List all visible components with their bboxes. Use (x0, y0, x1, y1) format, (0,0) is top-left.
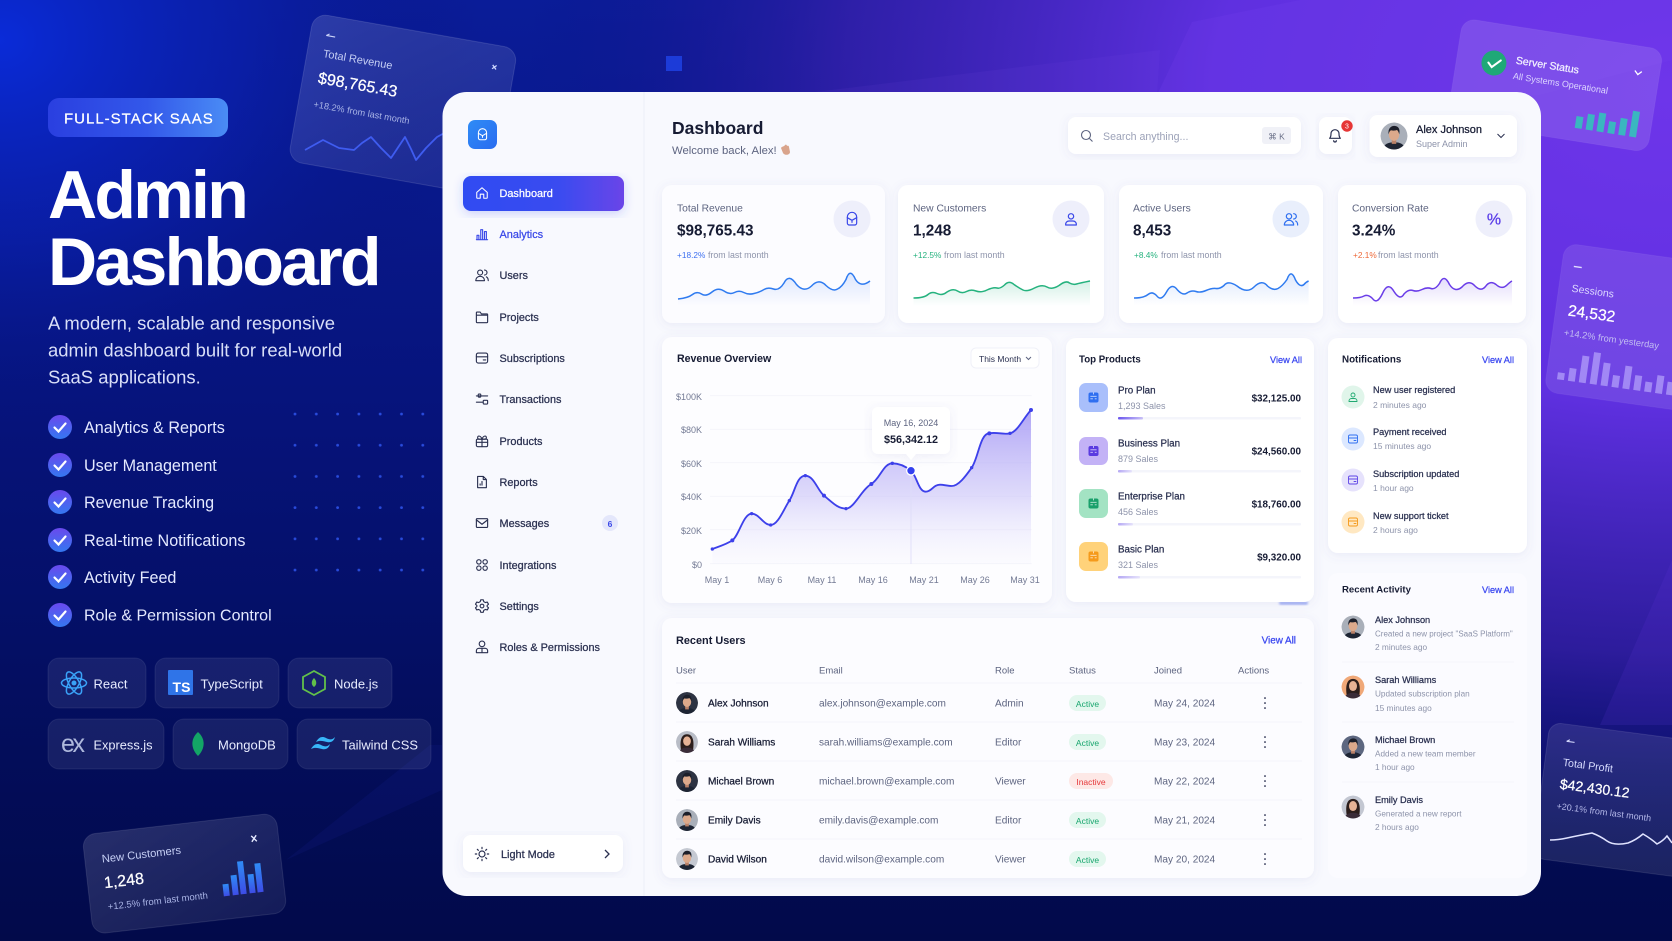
panel: Recent Activity: Recent Activity (1342, 584, 1412, 595)
nav: Settings: Settings (500, 601, 539, 613)
product: Business Plan: Business Plan (1118, 438, 1180, 449)
chip: TypeScript: TypeScript (200, 676, 263, 691)
panel: Notifications: Notifications (1342, 354, 1402, 365)
notification: New user registered (1342, 385, 1455, 410)
stat card: Conversion Rate: 3.24% (1352, 222, 1396, 239)
y axis labels: $40K (681, 492, 702, 502)
notification: New user registered: 2 minutes ago (1373, 400, 1427, 410)
floating card: Total Revenue: $98,765.43 (317, 70, 399, 101)
stat card: Conversion Rate: Conversion Rate (1352, 203, 1429, 214)
activity: Alex Johnson: Alex Johnson (1375, 615, 1430, 625)
stat card: New Customers: New Customers (913, 203, 986, 214)
x axis labels: May 11 (808, 575, 836, 585)
activity: Sarah Williams: 15 minutes ago (1375, 703, 1432, 713)
activity: Sarah Williams: Sarah Williams (1375, 675, 1437, 685)
search box: Search anything... (1103, 131, 1188, 143)
table header: Role (995, 665, 1015, 676)
product: Business Plan: $24,560.00 (1252, 446, 1301, 457)
feature: Revenue Tracking: Revenue Tracking (84, 494, 214, 512)
activity: Emily Davis: Emily Davis (1375, 795, 1423, 805)
row: Sarah Williams: Sarah Williams (708, 737, 775, 748)
nav: Transactions: Transactions (500, 394, 562, 406)
feature: Real-time Notifications: Real-time Notifications (84, 532, 245, 550)
description: SaaS applications. (48, 366, 201, 387)
panel: Notifications: View All (1482, 355, 1514, 365)
sidebar (463, 120, 624, 872)
panel: Revenue Overview: Revenue Overview (677, 353, 772, 365)
page heading: Dashboard (672, 118, 763, 138)
x axis labels: May 31 (1010, 575, 1040, 585)
product: Pro Plan: $32,125.00 (1252, 393, 1301, 404)
row: Emily Davis: emily.davis@example.com (819, 815, 938, 826)
badge: Full-stack SaaS: FULL-STACK SAAS (64, 110, 214, 127)
user menu (1370, 115, 1517, 157)
table header: Actions (1238, 665, 1269, 676)
row: Emily Davis: Emily Davis (708, 815, 761, 826)
activity: Michael Brown (1342, 735, 1476, 772)
stat card: Total Revenue: $98,765.43 (677, 222, 754, 239)
activity: Michael Brown: Added a new team member (1375, 749, 1476, 758)
notification: Payment received: Payment received (1373, 427, 1447, 437)
table header (676, 665, 1269, 676)
floating card: New Customers: New Customers (101, 845, 182, 866)
row: Emily Davis: Active (1076, 816, 1099, 826)
feature: Role & Permission Control: Role & Permission Control (84, 607, 272, 624)
product: Basic Plan: 321 Sales (1118, 560, 1159, 570)
nav: Messages: Messages (500, 518, 550, 530)
table header: Status (1069, 665, 1096, 676)
feature: Activity Feed: Activity Feed (84, 569, 176, 587)
product: Enterprise Plan: 456 Sales (1118, 507, 1159, 517)
y axis labels: $20K (681, 526, 702, 536)
product: Business Plan (1079, 437, 1301, 472)
panel: Notifications (1328, 338, 1527, 553)
feature: User Management (48, 453, 217, 477)
chip: Express.js: ex (61, 730, 86, 758)
title: Admin (48, 157, 246, 233)
stat card: Total Revenue: Total Revenue (677, 203, 743, 214)
nav: Dashboard (active): Dashboard (500, 188, 553, 200)
notification: Subscription updated: 1 hour ago (1373, 483, 1414, 493)
stat card: New Customers: 1,248 (913, 222, 952, 239)
panel: Recent Activity (1328, 573, 1527, 878)
stat card: Conversion Rate: % (1487, 211, 1501, 228)
header (672, 115, 1517, 157)
chip: Express.js (48, 719, 164, 769)
stat card: Active Users: from last month (1161, 250, 1222, 260)
chip: React: React (94, 676, 128, 691)
nav: Users (476, 270, 528, 282)
feature list (48, 415, 272, 627)
row: David Wilson: Viewer (995, 854, 1026, 865)
x axis labels: May 21 (909, 575, 939, 585)
activity: Emily Davis: Generated a new report (1375, 809, 1462, 818)
floating card: Total Profit (1532, 722, 1672, 884)
tooltip: $56,342.12 (884, 434, 938, 446)
chip: TypeScript: TS (173, 679, 190, 695)
row: Michael Brown (676, 770, 1265, 792)
row: Emily Davis (676, 809, 1265, 831)
chip: MongoDB (173, 719, 288, 769)
nav: Products (476, 436, 543, 448)
floating card: Total Profit: Total Profit (1562, 757, 1614, 775)
row: Emily Davis: Editor (995, 815, 1022, 826)
floating card: Total Revenue: +18.2% from last month (313, 99, 410, 126)
product: Basic Plan (1079, 542, 1302, 578)
user menu: Alex Johnson (1416, 124, 1482, 136)
product: Pro Plan: 1,293 Sales (1118, 401, 1166, 411)
chip: MongoDB: MongoDB (218, 737, 276, 752)
title (48, 157, 379, 300)
chip: React (48, 658, 146, 708)
y axis labels: $80K (681, 425, 702, 435)
product: Enterprise Plan: $18,760.00 (1252, 499, 1301, 510)
stat card: Total Revenue: +18.2% (677, 250, 706, 260)
notification: Payment received (1342, 427, 1447, 451)
activity: Alex Johnson: 2 minutes ago (1375, 642, 1428, 652)
description (48, 312, 342, 387)
row: Michael Brown: May 22, 2024 (1154, 776, 1216, 787)
floating card: Sessions: 24,532 (1567, 302, 1616, 326)
floating card: Sessions: +14.2% from yesterday (1563, 328, 1660, 351)
activity: Alex Johnson (1342, 615, 1513, 652)
nav: Messages (476, 515, 618, 531)
floating card: New Customers (82, 813, 287, 934)
row: Sarah Williams (676, 731, 1265, 753)
floating card: Server Status: All Systems Operational (1512, 71, 1609, 96)
row: Alex Johnson: May 24, 2024 (1154, 698, 1216, 709)
panel: Top Products: Top Products (1079, 354, 1141, 365)
product: Enterprise Plan (1079, 489, 1301, 526)
floating card: Server Status (1447, 18, 1664, 152)
nav: Roles & Permissions: Roles & Permissions (500, 642, 601, 654)
user menu: Super Admin (1416, 139, 1468, 149)
nav: Reports (478, 476, 538, 489)
nav: Analytics (476, 229, 544, 241)
nav: Settings (476, 600, 539, 613)
notification bell (1319, 117, 1353, 154)
row: David Wilson (676, 848, 1265, 870)
row: Sarah Williams: Active (1076, 738, 1099, 748)
y axis labels (676, 392, 702, 570)
welcome text: Welcome back, Alex! (672, 145, 777, 157)
table header: Joined (1154, 665, 1182, 676)
row: Alex Johnson: Admin (995, 698, 1024, 709)
chip: Node.js: Node.js (334, 676, 379, 691)
floating card: Total Revenue: Total Revenue (322, 48, 393, 72)
floating card: Total Profit: $42,430.12 (1559, 776, 1631, 801)
stat card: Conversion Rate: +2.1% (1353, 250, 1377, 260)
notification: Payment received: 15 minutes ago (1373, 441, 1431, 451)
product: Basic Plan: $9,320.00 (1257, 552, 1302, 563)
y axis labels: $0 (692, 560, 702, 570)
nav: Messages: 6 (608, 519, 613, 529)
stat card: Total Revenue (662, 185, 885, 323)
light mode toggle (463, 835, 623, 872)
stat card: New Customers: +12.5% (913, 250, 942, 260)
row: Alex Johnson: Alex Johnson (708, 698, 769, 709)
notification: Subscription updated: Subscription updated (1373, 469, 1459, 479)
row: David Wilson: May 20, 2024 (1154, 854, 1216, 865)
panel: Recent Users: Recent Users (676, 635, 746, 647)
floating card: Sessions: Sessions (1571, 283, 1615, 301)
x axis labels: May 6 (758, 575, 782, 585)
row: Michael Brown: Inactive (1076, 777, 1106, 787)
y axis labels: $60K (681, 459, 702, 469)
panel: Recent Users (662, 618, 1314, 878)
product: Business Plan: 879 Sales (1118, 454, 1159, 464)
feature: Analytics & Reports: Analytics & Reports (84, 419, 225, 437)
badge: Full-stack SaaS (48, 98, 228, 137)
row: David Wilson: david.wilson@example.com (819, 854, 944, 865)
area line chart (710, 396, 1033, 564)
x axis labels: May 1 (705, 575, 729, 585)
feature: Activity Feed (48, 565, 176, 589)
activity: Sarah Williams: Updated subscription plan (1375, 689, 1470, 698)
nav: Products: Products (500, 436, 543, 448)
search box (1068, 117, 1301, 154)
tooltip (872, 407, 950, 460)
stat card: Active Users: Active Users (1133, 203, 1191, 214)
chip: Tailwind CSS: Tailwind CSS (342, 737, 418, 752)
row: Sarah Williams: May 23, 2024 (1154, 737, 1216, 748)
description: admin dashboard built for real-world (48, 339, 342, 360)
tooltip: May 16, 2024 (884, 418, 938, 428)
nav: Subscriptions: Subscriptions (500, 353, 565, 365)
panel: Top Products: View All (1270, 355, 1302, 365)
activity: Alex Johnson: Created a new project "SaaS Platform" (1375, 629, 1513, 638)
row: Michael Brown: michael.brown@example.com (819, 776, 954, 787)
feature: Role & Permission Control (48, 603, 272, 627)
notification: New support ticket: 2 hours ago (1373, 525, 1418, 535)
row: Michael Brown: Viewer (995, 776, 1026, 787)
notification: New support ticket (1342, 510, 1449, 535)
tech chips (48, 658, 431, 769)
stat card: New Customers (898, 185, 1104, 323)
product: Basic Plan: Basic Plan (1118, 544, 1164, 555)
period dropdown: This Month (979, 354, 1021, 364)
table header: Email (819, 665, 843, 676)
product: Pro Plan: Pro Plan (1118, 385, 1156, 396)
stat card: Active Users: +8.4% (1134, 250, 1158, 260)
row: Alex Johnson (676, 692, 1265, 714)
panel: Revenue Overview (662, 337, 1052, 603)
stat card: Active Users: 8,453 (1133, 222, 1171, 239)
feature: User Management: User Management (84, 457, 217, 475)
notification: New support ticket: New support ticket (1373, 511, 1449, 521)
row: Alex Johnson: alex.johnson@example.com (819, 698, 946, 709)
chip: Tailwind CSS (297, 719, 431, 769)
stat card: New Customers: from last month (944, 250, 1005, 260)
nav: Projects: Projects (500, 312, 539, 324)
floating card: Server Status: Server Status (1515, 55, 1580, 76)
nav: Dashboard (active) (463, 176, 624, 211)
dashboard window (442, 92, 1541, 896)
x axis labels (705, 575, 1040, 585)
feature: Analytics & Reports (48, 415, 225, 439)
chip: Node.js (288, 658, 392, 708)
y axis labels: $100K (676, 392, 702, 402)
stat card: Conversion Rate: from last month (1378, 250, 1439, 260)
floating card: Total Revenue (288, 13, 518, 197)
activity: Sarah Williams (1342, 675, 1470, 713)
row: Sarah Williams: sarah.williams@example.com (819, 737, 953, 748)
product: Pro Plan (1079, 383, 1301, 420)
stat card: Conversion Rate (1338, 185, 1526, 323)
floating card: New Customers: +12.5% from last month (107, 890, 208, 913)
activity: Michael Brown: 1 hour ago (1375, 762, 1415, 772)
notification: Subscription updated (1342, 468, 1459, 493)
period dropdown (971, 348, 1039, 368)
table header: User (676, 665, 696, 676)
title: Dashboard (48, 224, 379, 300)
notification: New user registered: New user registered (1373, 385, 1455, 395)
chip: TypeScript (155, 658, 279, 708)
stat card: Total Revenue: from last month (708, 250, 769, 260)
activity: Michael Brown: Michael Brown (1375, 735, 1435, 745)
light mode toggle: Light Mode (501, 849, 555, 861)
stat card: Active Users (1119, 185, 1323, 323)
floating card: Total Profit: +20.1% from last month (1556, 801, 1652, 823)
floating card: New Customers: 1,248 (103, 871, 145, 892)
x axis labels: May 16 (858, 575, 888, 585)
chip: Express.js: Express.js (94, 737, 153, 752)
row: David Wilson: David Wilson (708, 854, 767, 865)
feature: Real-time Notifications (48, 528, 245, 552)
activity: Emily Davis: 2 hours ago (1375, 822, 1419, 832)
row: Michael Brown: Michael Brown (708, 776, 774, 787)
nav: Users: Users (500, 270, 528, 282)
panel: Top Products (1066, 338, 1314, 602)
x axis labels: May 26 (960, 575, 990, 585)
activity: Emily Davis (1342, 795, 1462, 832)
row: Emily Davis: May 21, 2024 (1154, 815, 1216, 826)
notification bell: 3 (1345, 123, 1349, 130)
row: Alex Johnson: Active (1076, 699, 1099, 709)
nav: Reports: Reports (500, 477, 538, 489)
nav: Analytics: Analytics (500, 229, 544, 241)
row: Sarah Williams: Editor (995, 737, 1022, 748)
feature: Revenue Tracking (48, 490, 214, 514)
panel: Recent Activity: View All (1482, 585, 1514, 595)
row: David Wilson: Active (1076, 855, 1099, 865)
nav: Integrations: Integrations (500, 560, 557, 572)
product: Enterprise Plan: Enterprise Plan (1118, 491, 1185, 502)
floating card: Sessions (1544, 243, 1672, 419)
description: A modern, scalable and responsive (48, 312, 335, 333)
nav: Projects (476, 312, 539, 324)
logo (468, 120, 497, 149)
panel: Recent Users: View All (1262, 635, 1296, 646)
search box: ⌘ K (1268, 131, 1285, 141)
